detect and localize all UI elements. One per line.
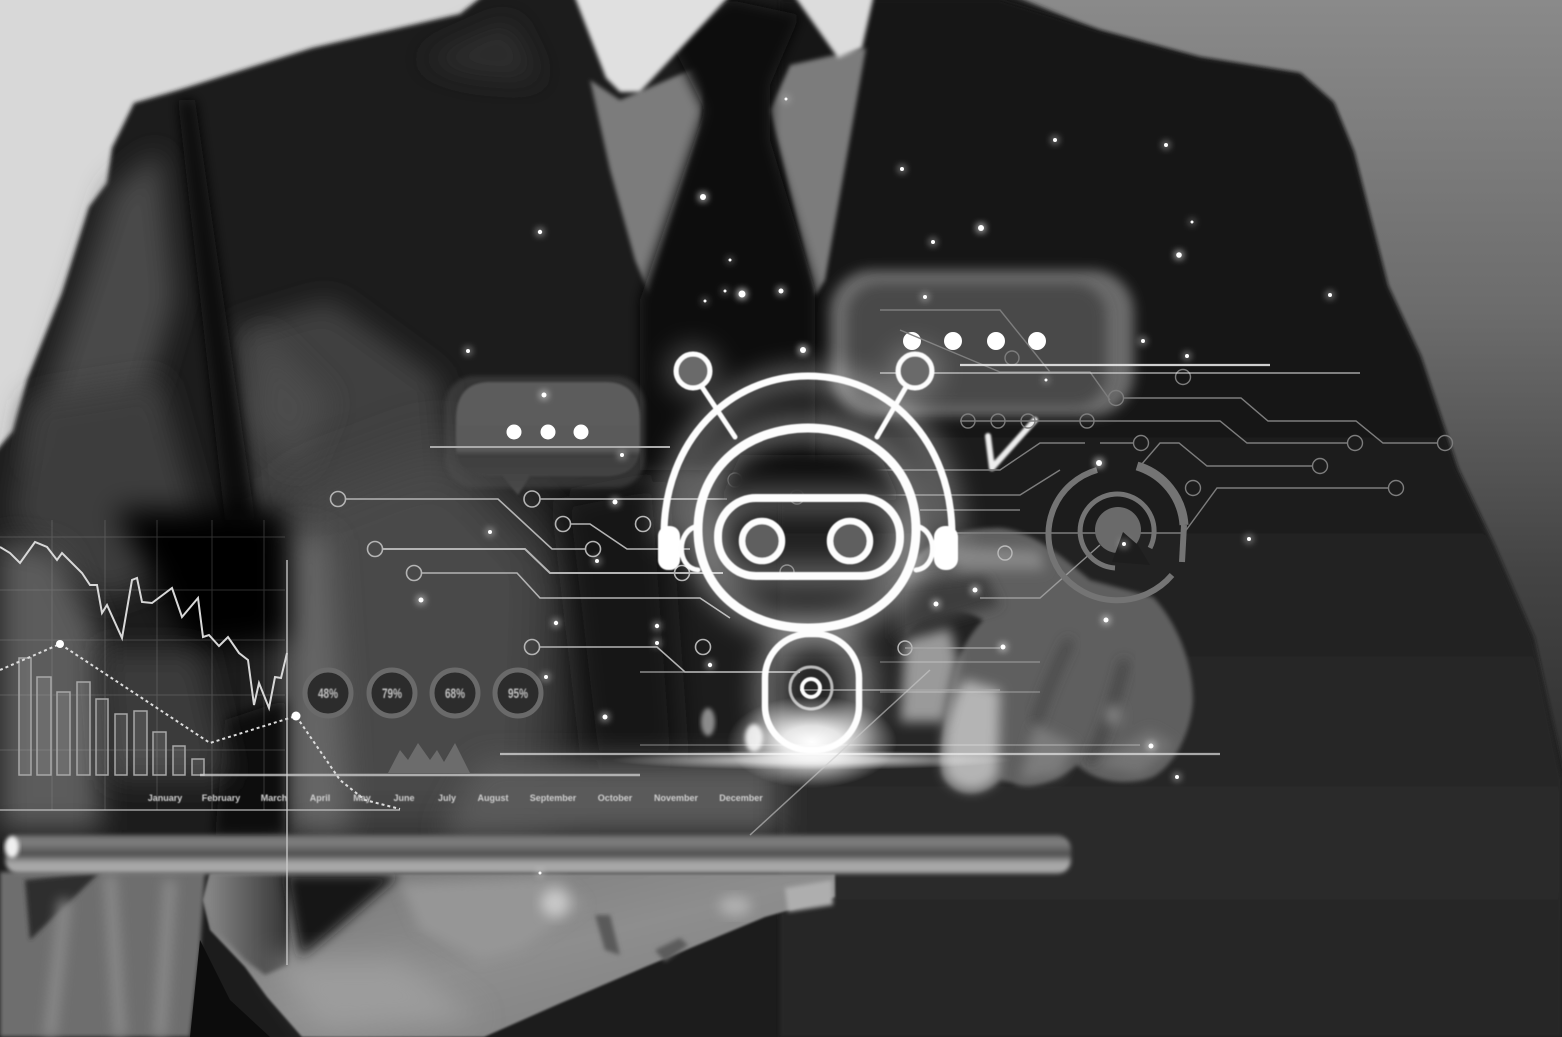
month labels: October (598, 793, 633, 803)
shirt collar (572, 0, 875, 92)
month labels: June (393, 793, 415, 803)
bar chart (19, 658, 204, 775)
dotted trend line (0, 640, 400, 809)
month labels: February (202, 793, 240, 803)
light flare at fingertip (612, 670, 1012, 835)
month labels: November (654, 793, 699, 803)
shirt (590, 48, 866, 296)
necktie (640, 0, 815, 470)
body (765, 634, 859, 750)
hand web shadow (895, 575, 1000, 640)
pointing hand (905, 528, 1193, 793)
antennae (676, 354, 932, 437)
knuckle highlights (900, 545, 1175, 780)
helmet arc (664, 376, 952, 535)
month labels: January (148, 793, 182, 803)
month labels: December (719, 793, 763, 803)
stock line chart (0, 542, 287, 708)
month labels: March (261, 793, 287, 803)
circuit lines left (330, 491, 800, 672)
index finger highlight (944, 680, 1000, 790)
jacket folds and lapels (0, 20, 780, 1037)
chart grid (0, 520, 285, 810)
chart axes (0, 560, 640, 965)
bright streak lines (500, 365, 1360, 754)
small speech bubble (430, 376, 670, 495)
target ring hologram (1048, 466, 1184, 600)
percent gauges: 79% (382, 685, 402, 701)
percent gauges (305, 670, 541, 716)
month labels: September (530, 793, 577, 803)
eyes (742, 521, 782, 561)
holding hand (203, 874, 835, 1037)
month labels: August (478, 793, 508, 803)
tablet (5, 835, 1071, 874)
large speech bubble (830, 267, 1134, 468)
chatbot interior shade (720, 455, 900, 500)
month labels: April (310, 793, 330, 803)
mountain area chart (388, 743, 470, 773)
fingers shading (1035, 640, 1070, 725)
percent gauges: 48% (318, 685, 338, 701)
month labels (148, 793, 763, 803)
ears (658, 526, 680, 570)
percent gauges: 68% (445, 685, 465, 701)
chatbot icon (658, 354, 958, 750)
eye visor (718, 498, 900, 576)
chatbot glow (668, 354, 950, 750)
circuit lines right (640, 310, 1452, 690)
head (698, 428, 916, 628)
sparkles (418, 98, 1332, 874)
month labels: July (438, 793, 456, 803)
month labels: May (353, 793, 371, 803)
percent gauges: 95% (508, 685, 528, 701)
